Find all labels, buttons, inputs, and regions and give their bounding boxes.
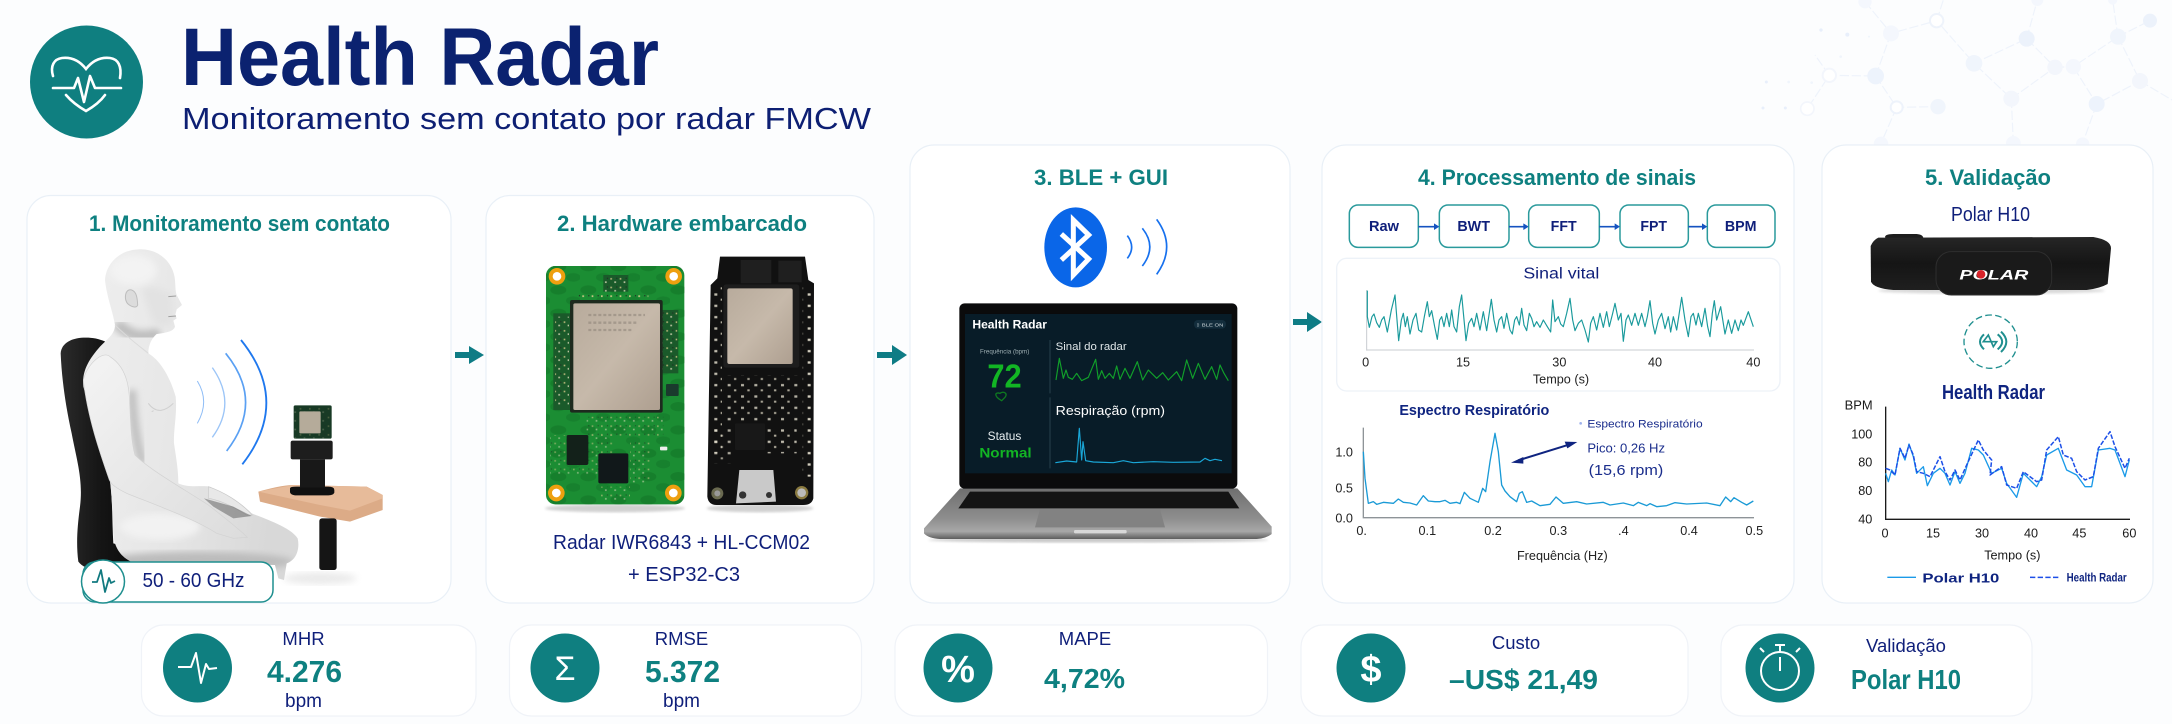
chart: espectro respiratorio: 0.0 bbox=[1335, 511, 1353, 525]
metric card: custo bbox=[1301, 625, 1688, 716]
chart: espectro respiratorio: 0.1 bbox=[1419, 524, 1436, 538]
chart: sinal vital bbox=[1337, 258, 1780, 391]
arrow: 3 to 4 bbox=[1293, 312, 1322, 332]
arrow: 2 to 3 bbox=[877, 345, 907, 365]
GUI heading: Health Radar bbox=[972, 318, 1047, 332]
icon: Polar H10 strap bbox=[1871, 234, 2111, 295]
flow: processing pipeline: Raw bbox=[1369, 218, 1399, 235]
arrow: 1 to 2 bbox=[455, 346, 484, 364]
flow: processing pipeline: FFT bbox=[1551, 218, 1577, 235]
chart: espectro respiratorio: 0.3 bbox=[1550, 524, 1567, 538]
metric card: MHR: 4.276 bbox=[267, 655, 342, 689]
metric card: RMSE: bpm bbox=[663, 691, 700, 712]
chart: validation BPM: 30 bbox=[1975, 526, 1989, 540]
chart: sinal vital: 40 bbox=[1648, 356, 1662, 370]
heading: panel 2: 2. Hardware embarcado bbox=[557, 211, 807, 236]
metric card: RMSE: 5.372 bbox=[645, 655, 720, 689]
chart: espectro respiratorio: (15,6 rpm) bbox=[1589, 462, 1663, 479]
chart: sinal vital: Sinal vital bbox=[1523, 265, 1599, 282]
chart: espectro respiratorio bbox=[1335, 402, 1763, 563]
icon: Polar H10 strap: POLAR bbox=[1959, 266, 2028, 282]
icon: percent: % bbox=[941, 649, 975, 691]
laptop with GUI: Status bbox=[988, 429, 1021, 443]
chart: espectro respiratorio: 0.5 bbox=[1335, 481, 1353, 495]
frequency badge bbox=[82, 560, 273, 603]
chart: validation BPM: Health Radar bbox=[2067, 571, 2127, 585]
heading: panel 1: 1. Monitoramento sem contato bbox=[89, 211, 390, 236]
chart: sinal vital: 30 bbox=[1552, 356, 1566, 370]
chart: espectro respiratorio: 0.4 bbox=[1680, 524, 1698, 538]
illustration: seated person, radar on table bbox=[61, 249, 383, 584]
chart: validation BPM: 80 bbox=[1858, 484, 1872, 498]
green radar board bbox=[545, 266, 685, 512]
metric card: MAPE bbox=[895, 625, 1268, 716]
chart: validation BPM: 40 bbox=[2024, 526, 2038, 540]
icon: sigma bbox=[530, 634, 600, 702]
chart: sinal vital: 15 bbox=[1456, 356, 1470, 370]
metric card: MHR: bpm bbox=[285, 691, 322, 712]
metric card: validacao: Polar H10 bbox=[1851, 664, 1961, 695]
metric card: custo: –US$ 21,49 bbox=[1449, 664, 1598, 695]
heading: panel 4: 4. Processamento de sinais bbox=[1418, 165, 1696, 190]
flow: processing pipeline: BWT bbox=[1457, 218, 1490, 235]
metric card: validacao bbox=[1721, 625, 2032, 716]
chart: espectro respiratorio: Espectro Respiratório bbox=[1587, 419, 1703, 431]
laptop with GUI: Sinal do radar bbox=[1056, 341, 1127, 353]
metric card: RMSE: RMSE bbox=[655, 628, 708, 649]
chart: espectro respiratorio: Pico: 0,26 Hz bbox=[1587, 442, 1665, 456]
heading: panel 3: 3. BLE + GUI bbox=[1034, 165, 1168, 190]
chart: sinal vital: 0 bbox=[1362, 356, 1369, 370]
chart: validation BPM: Tempo (s) bbox=[1984, 548, 2040, 562]
chart: validation BPM: 60 bbox=[2122, 526, 2136, 540]
panel: validacao bbox=[1822, 145, 2153, 603]
icon: wireless link bbox=[1964, 315, 2017, 368]
panel: processamento de sinais bbox=[1322, 145, 1794, 603]
icon: sigma: Σ bbox=[554, 650, 576, 688]
icon: pulse bbox=[163, 634, 232, 702]
subtitle: Monitoramento sem contato por radar FMCW bbox=[182, 101, 872, 136]
chart: espectro respiratorio: Espectro Respiratório bbox=[1399, 402, 1549, 419]
chart: espectro respiratorio: 0. bbox=[1356, 524, 1367, 538]
panel: hardware embarcado bbox=[486, 196, 874, 603]
chart: validation BPM: BPM bbox=[1845, 398, 1873, 412]
laptop with GUI: Respiração (rpm) bbox=[1056, 403, 1165, 418]
chart: validation BPM: 40 bbox=[1858, 512, 1872, 526]
chart: espectro respiratorio: 0.2 bbox=[1484, 524, 1502, 538]
logo icon: heart with pulse bbox=[30, 26, 143, 138]
flow: processing pipeline bbox=[1349, 205, 1775, 247]
chart: validation BPM: Polar H10 bbox=[1922, 571, 1999, 585]
metric card: MAPE: 4,72% bbox=[1044, 663, 1125, 694]
chart: validation BPM: 0 bbox=[1881, 526, 1889, 540]
caption: hardware: Radar IWR6843 + HL-CCM02 bbox=[553, 532, 810, 554]
title: Health Radar bbox=[181, 12, 659, 103]
chart: espectro respiratorio: 1.0 bbox=[1335, 446, 1353, 460]
flow: processing pipeline: FPT bbox=[1640, 218, 1667, 235]
heading: panel 5: 5. Validação bbox=[1925, 165, 2051, 190]
chart: validation BPM bbox=[1845, 398, 2136, 585]
metric card: custo: Custo bbox=[1492, 632, 1540, 653]
metric card: MHR: MHR bbox=[282, 628, 325, 649]
icon: stopwatch bbox=[1746, 634, 1814, 702]
chart: espectro respiratorio: 0.5 bbox=[1746, 524, 1763, 538]
icon: dollar bbox=[1336, 634, 1406, 702]
panel: monitoramento sem contato bbox=[27, 196, 451, 603]
icon: percent bbox=[924, 634, 992, 702]
caption: hardware line 2: + ESP32-C3 bbox=[628, 564, 740, 586]
background molecule network bbox=[1761, 0, 2172, 151]
metric card: MHR bbox=[142, 625, 476, 716]
icon: bluetooth with waves bbox=[1044, 207, 1167, 287]
chart: sinal vital: 40 bbox=[1746, 356, 1760, 370]
chart: espectro respiratorio: Frequência (Hz) bbox=[1517, 549, 1608, 563]
chart: validation BPM: 15 bbox=[1926, 526, 1940, 540]
laptop with GUI: Frequência (bpm) bbox=[980, 348, 1029, 355]
metric card: validacao: Validação bbox=[1866, 635, 1946, 656]
flow: processing pipeline: BPM bbox=[1725, 218, 1756, 235]
label: Health Radar: Health Radar bbox=[1942, 382, 2045, 404]
chart: validation BPM: 100 bbox=[1851, 427, 1872, 441]
chart: validation BPM: 80 bbox=[1858, 456, 1872, 470]
metric card: MAPE: MAPE bbox=[1059, 628, 1111, 649]
frequency badge: 50 - 60 GHz bbox=[142, 570, 244, 592]
label: Polar H10: Polar H10 bbox=[1951, 204, 2030, 226]
laptop with GUI: 72 bbox=[987, 358, 1022, 395]
laptop with GUI bbox=[924, 303, 1272, 543]
chart: sinal vital: Tempo (s) bbox=[1533, 372, 1589, 386]
laptop with GUI: Normal bbox=[979, 444, 1032, 460]
icon: dollar: $ bbox=[1360, 649, 1382, 691]
black ESP32 board bbox=[707, 257, 814, 512]
chart: espectro respiratorio: .4 bbox=[1618, 524, 1629, 538]
chart: validation BPM: 45 bbox=[2072, 526, 2086, 540]
laptop with GUI: ᛒ BLE ON bbox=[1197, 323, 1223, 328]
metric card: RMSE bbox=[510, 625, 862, 716]
panel: BLE + GUI bbox=[910, 145, 1290, 603]
